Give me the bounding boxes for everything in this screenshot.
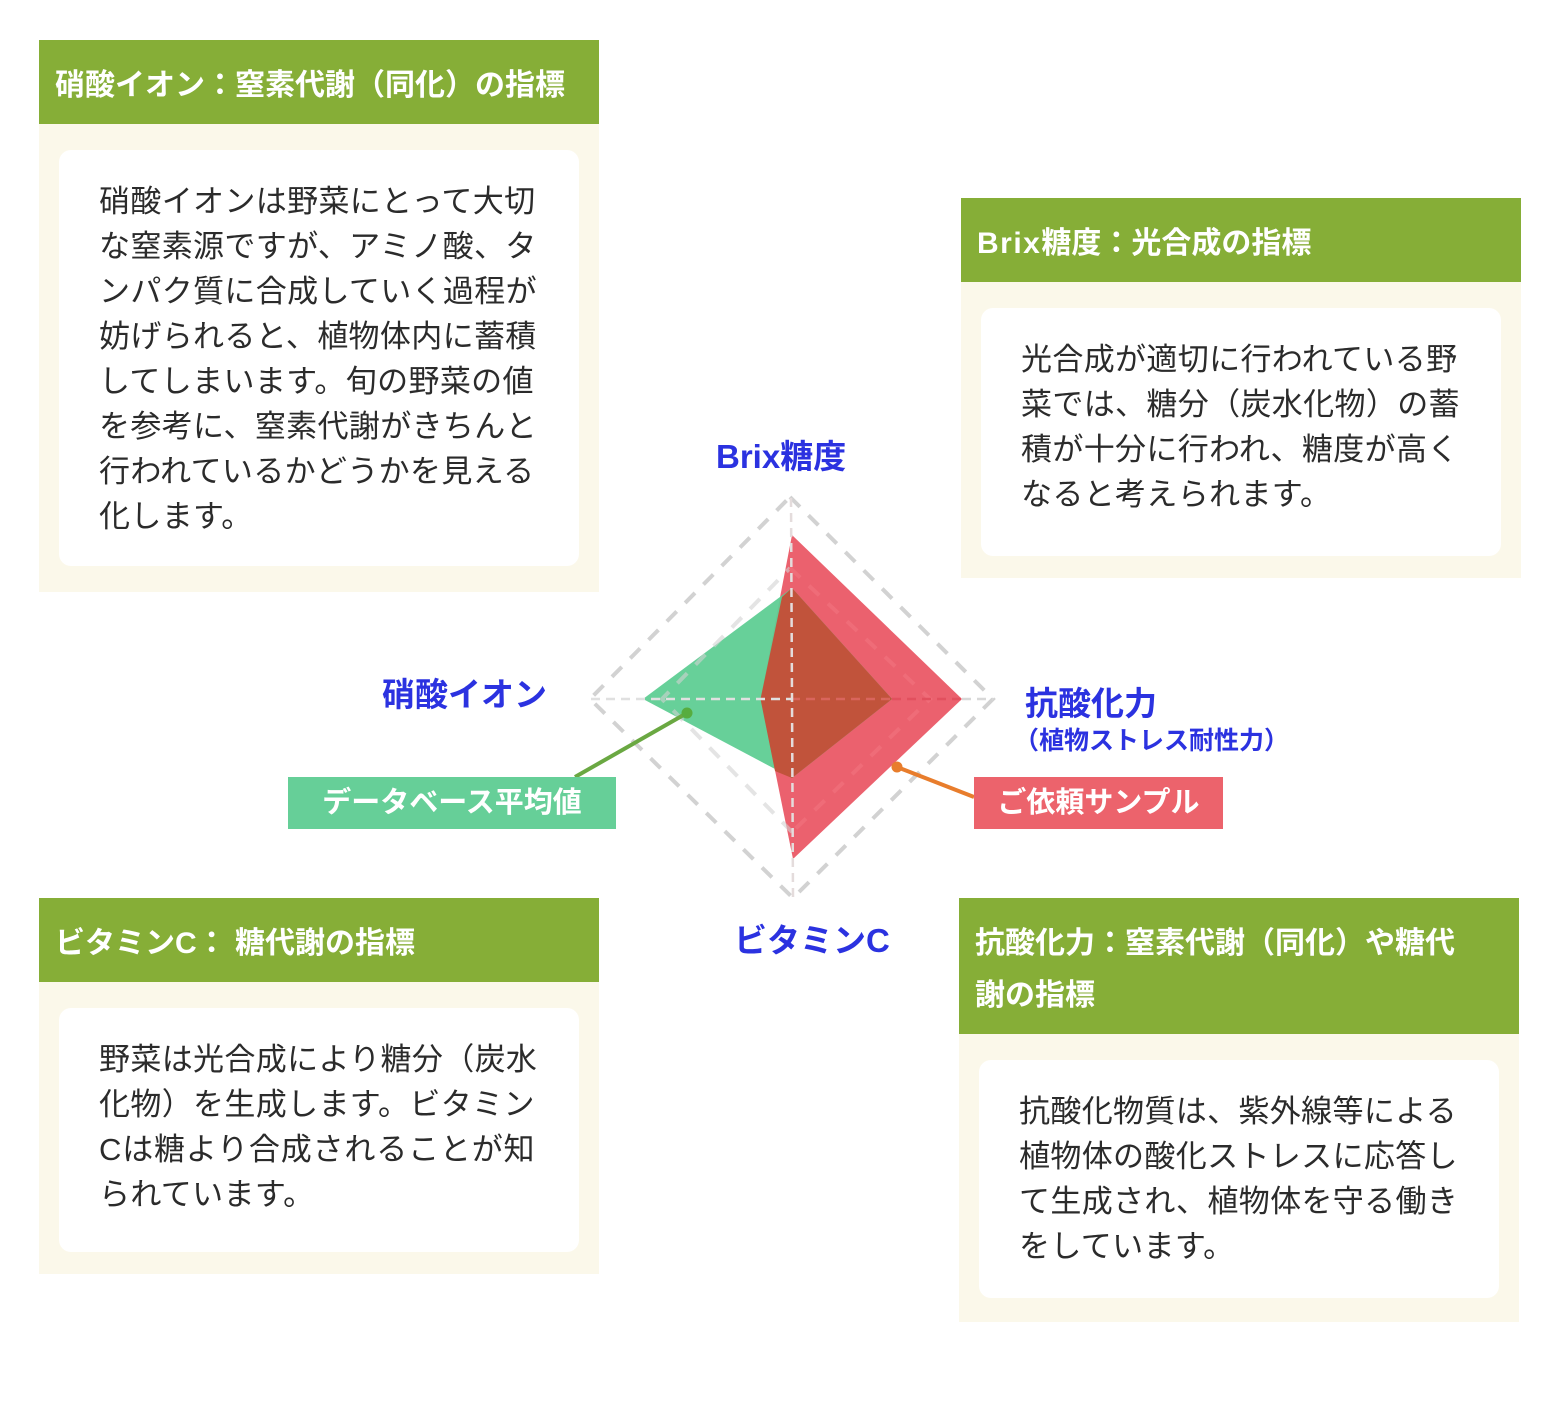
heading: vitamin C: ビタミンC： 糖代謝の指標 [55,927,415,960]
heading: antioxidant: 抗酸化力：窒素代謝（同化）や糖代 [975,927,1455,960]
axis label: nitrate ion: 硝酸イオン [382,676,547,713]
body text: nitrate ion [99,184,537,534]
body text: nitrate ion: 行われているかどうかを見える [99,454,534,489]
heading: nitrate ion [39,40,599,124]
body text: antioxidant [1019,1094,1458,1264]
panel: nitrate ion [39,40,599,592]
text box: nitrate ion [59,150,579,566]
heading: antioxidant: 謝の指標 [975,979,1095,1012]
axis sublabel: plant stress tolerance: （植物ストレス耐性力） [1014,727,1289,755]
body text: antioxidant: 抗酸化物質は、紫外線等による [1019,1094,1457,1129]
body text: Brix [1021,342,1460,512]
text box: antioxidant [979,1060,1499,1298]
body text: nitrate ion: ンパク質に合成していく過程が [99,274,537,309]
series overlap [760,588,892,778]
panel: vitamin C [39,898,599,1274]
body text: antioxidant: をしています。 [1019,1229,1234,1264]
body text: antioxidant: 植物体の酸化ストレスに応答し [1019,1139,1458,1174]
legend tag: requested sample: ご依頼サンプル [997,787,1200,819]
legend tag: database average [288,777,616,829]
heading: Brix [961,198,1521,282]
text box: vitamin C [59,1008,579,1252]
leader line: database average [575,708,692,777]
heading: vitamin C [39,898,599,982]
series: requested sample [760,535,962,859]
legend tag: requested sample [974,777,1223,829]
heading: Brix: Brix糖度：光合成の指標 [977,227,1311,260]
axis label: antioxidant: 抗酸化力 [1025,685,1157,722]
panel: Brix [961,198,1521,578]
body text: nitrate ion: 妨げられると、植物体内に蓄積 [99,319,537,354]
leader line: requested sample [892,762,974,797]
heading: nitrate ion: 硝酸イオン：窒素代謝（同化）の指標 [55,69,565,102]
legend tag: database average: データベース平均値 [322,787,582,819]
body text: nitrate ion: を参考に、窒素代謝がきちんと [99,409,537,444]
body text: vitamin C: Cは糖より合成されることが知 [99,1132,535,1167]
body text: vitamin C: られています。 [99,1177,314,1212]
series: database average [643,588,892,778]
body text: nitrate ion: してしまいます。旬の野菜の値 [99,364,534,399]
body text: Brix: 積が十分に行われ、糖度が高く [1021,432,1459,467]
body text: vitamin C [99,1042,537,1212]
body text: Brix: 菜では、糖分（炭水化物）の蓄 [1021,387,1460,422]
panel: antioxidant [959,898,1519,1322]
body text: nitrate ion: な窒素源ですが、アミノ酸、タ [99,229,537,264]
axis label: vitamin C: ビタミンC [734,922,890,959]
body text: nitrate ion: 硝酸イオンは野菜にとって大切 [99,184,535,219]
body text: vitamin C: 化物）を生成します。ビタミン [99,1087,535,1122]
heading: antioxidant [959,898,1519,1034]
axis label: Brix: Brix糖度 [716,438,846,475]
body text: Brix: 光合成が適切に行われている野 [1021,342,1457,377]
body text: antioxidant: て生成され、植物体を守る働き [1019,1184,1458,1219]
body text: vitamin C: 野菜は光合成により糖分（炭水 [99,1042,537,1077]
body text: Brix: なると考えられます。 [1021,477,1331,512]
body text: nitrate ion: 化します。 [99,499,253,534]
text box: Brix [981,308,1501,556]
